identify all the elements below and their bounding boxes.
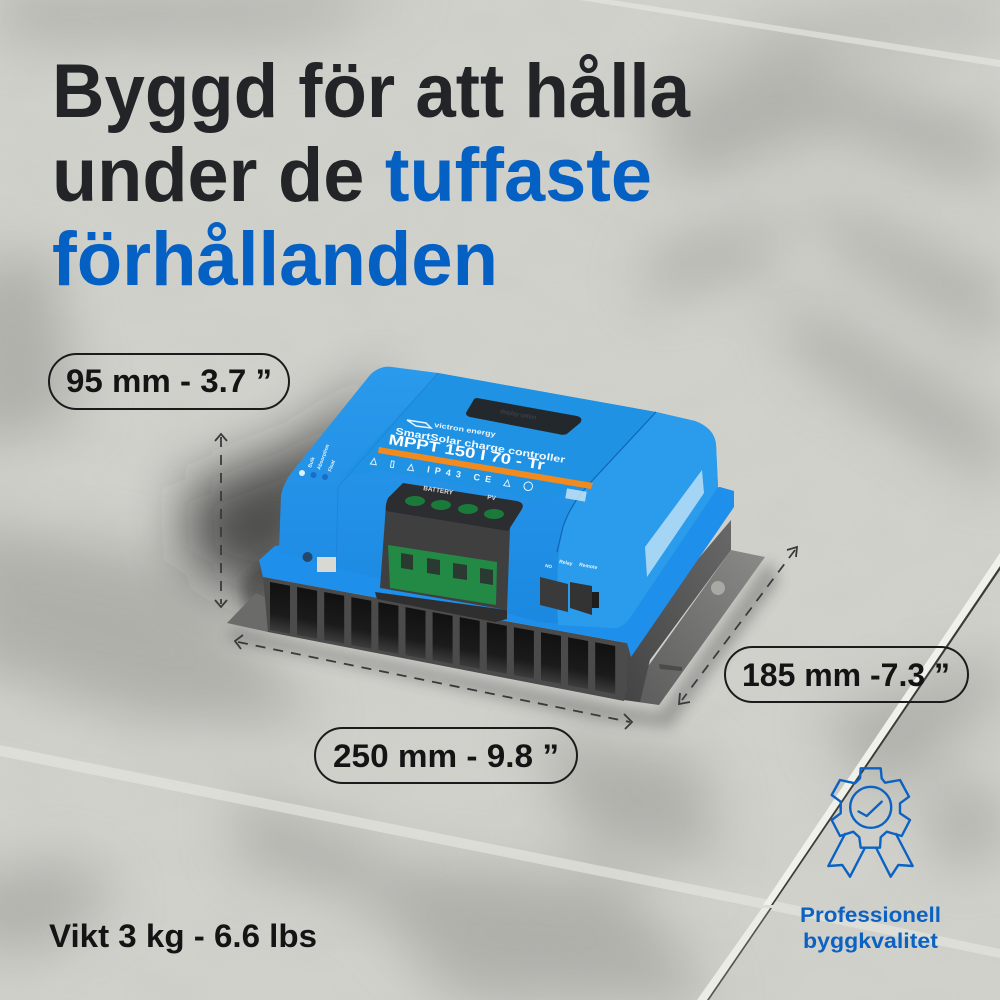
pill: height bbox=[49, 354, 289, 409]
dimension arrow: depth bbox=[679, 547, 797, 704]
terminal block bbox=[375, 483, 523, 622]
display option cover bbox=[466, 398, 581, 435]
terminal block: PV bbox=[487, 494, 497, 502]
housing edge highlight bbox=[336, 373, 438, 570]
status leds bbox=[299, 444, 337, 480]
connector openings bbox=[401, 553, 493, 585]
qr code bbox=[565, 488, 587, 502]
display option cover: display option bbox=[500, 409, 537, 421]
white spec label bbox=[645, 470, 704, 577]
relay connectors: Relay bbox=[559, 559, 573, 567]
terminal top bbox=[386, 483, 523, 531]
housing seam bbox=[557, 412, 656, 552]
victron logo mark bbox=[407, 420, 431, 428]
status leds: Absorption bbox=[316, 444, 331, 471]
weight text: Vikt 3 kg - 6.6 lbs bbox=[49, 918, 317, 954]
status leds: Bulk bbox=[307, 456, 317, 469]
status leds: Float bbox=[327, 459, 337, 473]
pill: width: 250 mm - 9.8 ” bbox=[333, 738, 559, 774]
model name: MPPT 150 I 70 - Tr bbox=[387, 432, 546, 474]
dimension arrow: height bbox=[215, 434, 227, 607]
victron logo text: victron energy bbox=[434, 422, 496, 439]
badge caption bbox=[800, 904, 941, 953]
terminal indicators bbox=[405, 496, 504, 519]
terminal lower lip bbox=[375, 592, 507, 622]
ve.direct port bbox=[302, 552, 336, 572]
title line 3: förhållanden bbox=[52, 217, 498, 302]
pill: depth bbox=[725, 647, 968, 702]
blue housing body bbox=[279, 367, 718, 628]
title line 2: under de tuffaste bbox=[52, 133, 652, 218]
mounting plate: left bbox=[227, 593, 280, 632]
pill: depth: 185 mm -7.3 ” bbox=[742, 657, 950, 693]
housing top panel bbox=[340, 373, 656, 500]
heatsink front with fins bbox=[263, 577, 627, 701]
caption line 1: Professionell bbox=[800, 904, 941, 927]
icon: quality badge bbox=[828, 768, 913, 877]
relay connectors: NO bbox=[545, 563, 553, 569]
housing right section bbox=[557, 412, 718, 628]
title line 1: Byggd för att hålla bbox=[52, 49, 691, 134]
caption line 2: byggkvalitet bbox=[803, 930, 938, 953]
relay connectors bbox=[540, 559, 599, 615]
mounting screw bbox=[659, 664, 682, 671]
terminal labels: BATTERY bbox=[423, 485, 454, 497]
certification marks: △ ▯ △ IP43 CE △ ◯ bbox=[369, 455, 534, 492]
green connector bbox=[388, 545, 497, 605]
product name: SmartSolar charge controller bbox=[394, 426, 566, 466]
device drop shadow bbox=[185, 370, 780, 728]
pill: width bbox=[315, 728, 577, 783]
orange stripe bbox=[378, 447, 593, 489]
relay connectors: Remote bbox=[579, 562, 598, 571]
mounting plate: right bbox=[624, 550, 765, 705]
terminal housing bbox=[380, 505, 510, 610]
blue base flange bbox=[259, 487, 734, 657]
solar charge controller device bbox=[227, 367, 765, 705]
mounting slot bbox=[711, 581, 725, 595]
title bbox=[52, 49, 691, 302]
dimension arrow: width bbox=[235, 635, 632, 729]
pill: height: 95 mm - 3.7 ” bbox=[66, 363, 272, 399]
heatsink side bbox=[624, 520, 731, 702]
